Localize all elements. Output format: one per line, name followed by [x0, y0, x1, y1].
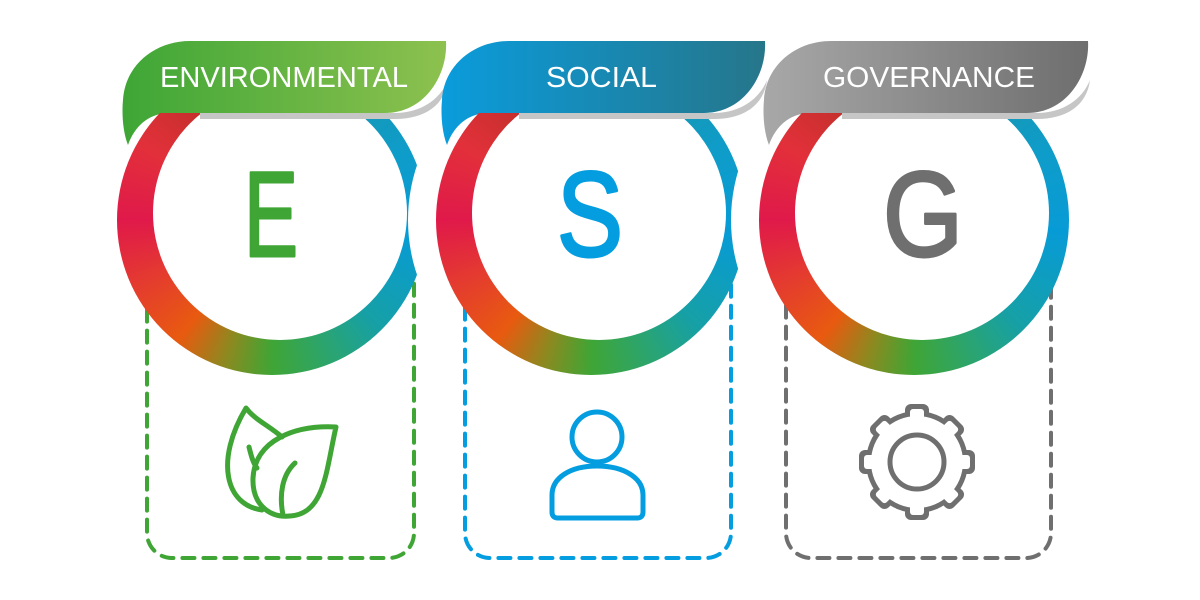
overlay: governance: GOVERNANCE — [823, 62, 1035, 94]
column: environmental — [117, 41, 446, 560]
icon: leaves — [228, 408, 336, 516]
overlay: environmental: E — [244, 146, 298, 282]
ring: governance — [759, 113, 1069, 375]
ring: social — [436, 113, 738, 375]
overlay: social: S — [557, 146, 623, 282]
column: social — [408, 41, 767, 560]
icon: person — [552, 412, 643, 518]
overlay: governance: G — [883, 146, 963, 282]
overlay: social: SOCIAL — [546, 62, 657, 94]
ring: environmental — [117, 113, 417, 375]
icon: gear — [859, 404, 975, 520]
overlay: environmental: ENVIRONMENTAL — [160, 62, 408, 94]
column: governance — [731, 41, 1090, 560]
